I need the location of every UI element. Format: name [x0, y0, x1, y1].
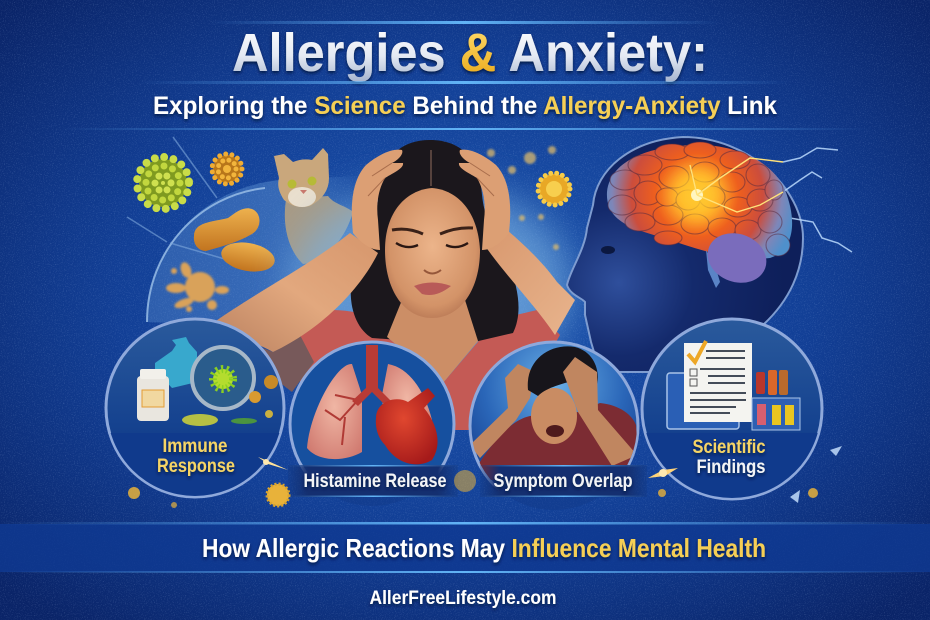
woman	[213, 140, 575, 430]
left arm	[213, 233, 378, 352]
lightning	[783, 148, 852, 252]
man's hair	[528, 346, 598, 396]
label: immune response: Immune	[162, 436, 228, 457]
brain	[607, 142, 792, 259]
right arm	[483, 230, 575, 335]
medicine bottle	[137, 369, 169, 421]
label: immune response	[157, 436, 235, 477]
checklist	[684, 341, 752, 422]
chart bars	[752, 398, 800, 430]
heart	[376, 388, 438, 464]
panel: immune response	[100, 319, 290, 503]
brows	[392, 228, 473, 234]
panel: histamine release	[290, 342, 454, 506]
mouth	[414, 282, 451, 295]
cerebellum	[701, 225, 773, 291]
halo behind woman	[292, 185, 572, 385]
website url: AllerFreeLifestyle.com	[370, 588, 556, 609]
brain flash	[673, 158, 783, 219]
eyes	[396, 243, 468, 247]
icon: yellow pollen right	[538, 173, 570, 205]
lungs	[307, 364, 432, 459]
panel: scientific findings	[640, 319, 830, 503]
icon: green pollen	[137, 157, 189, 209]
subtitle: Exploring the Science Behind the Allergy-Anxiety Link	[153, 92, 777, 120]
man's right arm	[563, 357, 637, 466]
label: immune response: Response	[157, 456, 235, 477]
label: symptom overlap: Symptom Overlap	[494, 471, 632, 492]
panel: brain and head silhouette	[567, 137, 852, 372]
allergen dish	[147, 176, 360, 330]
eye	[601, 246, 615, 254]
left arm shade	[213, 323, 314, 392]
trachea	[352, 345, 392, 406]
small pollen stars	[487, 146, 559, 250]
tablet	[667, 373, 739, 429]
man's face	[531, 388, 577, 444]
icon: orange pollen	[212, 154, 242, 184]
man's mouth	[546, 425, 564, 437]
neck	[387, 300, 478, 383]
hair part	[430, 150, 432, 186]
label: scientific findings	[692, 437, 766, 478]
icon: virus magnifier	[192, 347, 254, 409]
face	[385, 188, 480, 318]
panel: allergens	[127, 137, 360, 330]
banner: How Allergic Reactions May Influence Mental Health	[202, 533, 766, 563]
banner	[0, 522, 930, 573]
title: Allergies & Anxiety:	[232, 23, 708, 83]
hair	[351, 140, 519, 343]
label: histamine release	[288, 465, 458, 497]
right hand	[459, 150, 510, 250]
label: histamine release: Histamine Release	[304, 471, 446, 492]
flowers and leaves	[182, 375, 278, 426]
jug	[155, 337, 197, 388]
icon: dust particles	[166, 261, 229, 312]
dish rim	[147, 188, 265, 322]
divider	[110, 433, 280, 496]
label: scientific findings: Findings	[696, 457, 766, 478]
label: symptom overlap	[480, 465, 647, 497]
panel: symptom overlap	[470, 342, 640, 510]
nose	[424, 270, 441, 274]
label: scientific findings: Scientific	[692, 437, 766, 458]
divider	[646, 433, 818, 498]
test tubes	[756, 370, 788, 395]
dish spokes	[127, 137, 262, 270]
man's shirt	[475, 403, 640, 480]
shirt	[300, 310, 560, 430]
icon: peanuts	[194, 208, 277, 275]
man's left arm	[470, 364, 535, 458]
sparkles	[128, 446, 842, 508]
left hand	[352, 150, 403, 250]
icon: cat	[274, 148, 353, 264]
head silhouette	[567, 137, 803, 372]
